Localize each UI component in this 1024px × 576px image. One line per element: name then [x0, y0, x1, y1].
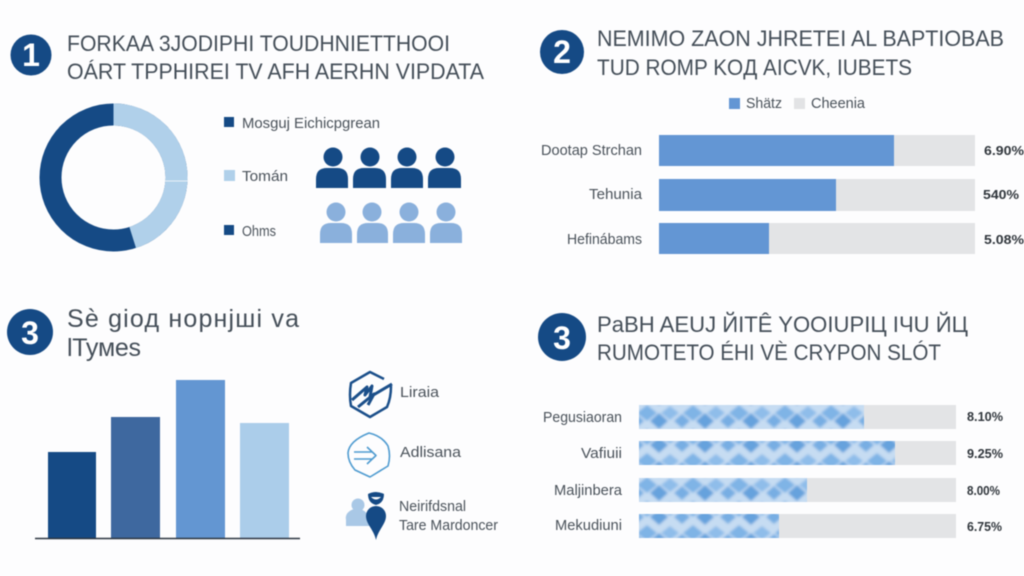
heading: section 2: TUD ROMP KOД AICVK, IUBETS [597, 55, 912, 80]
icon: people pin [346, 492, 386, 540]
donut chart [50, 104, 188, 248]
badge: number 2 [540, 30, 584, 74]
badge: number 1: 1 [22, 37, 40, 73]
label: Neirifdsnal Tare Mardoncer: Tare Mardoncer [399, 518, 498, 534]
badge: number 2: 2 [553, 34, 571, 70]
bar row: Mekudiuni: 6.75% [967, 519, 1002, 534]
bar row: Hefinábams: 5.08% [984, 232, 1024, 247]
bar row: Pegusiaoran: 8.10% [967, 409, 1003, 424]
bar row: Vafiuii: 9.25% [967, 446, 1003, 461]
legend: donut categories: Ohms [242, 224, 276, 240]
icons: light people row [320, 202, 462, 243]
heading: section 4 [597, 312, 968, 365]
legend: bar series [729, 96, 866, 112]
bar row: Maljinbera: 8.00% [967, 483, 1000, 498]
badge: number 3 [7, 309, 53, 355]
heading: section 1: FORKAA 3JODIPHI TOUDHNIETTHOOI [67, 31, 450, 56]
bar row: Vafiuii: Vafiuii [581, 446, 622, 462]
badge: number 1 [10, 34, 52, 76]
bar row: Hefinábams: Hefinábams [567, 232, 642, 248]
bar row: Tehunia: Tehunia [589, 187, 643, 203]
legend: donut categories: Mosguj Eichicpgrean [242, 116, 380, 132]
legend: bar series: Shätz [746, 96, 782, 112]
bar row: Mekudiuni [555, 513, 1002, 539]
heading: section 3: Sè gіод нopнjші vа [67, 305, 299, 333]
bar row: Tehunia [589, 179, 1019, 211]
icon: hexagon bolt [350, 372, 392, 417]
badge: second number 3: 3 [553, 320, 571, 356]
label: Adlisana: Adlisana [400, 445, 462, 461]
legend: donut categories [224, 116, 380, 240]
panel: section 3 column chart [7, 305, 498, 540]
panel: section 4 patterned bars [538, 312, 1003, 541]
label: Neirifdsnal Tare Mardoncer [399, 499, 498, 534]
panel: section 1 donut and people [10, 31, 484, 248]
legend: donut categories: Tomán [242, 169, 288, 185]
heading: section 1: OÁRT TPPHIREI TV AFH AERHN VIPDATA [67, 59, 484, 84]
bar row: Tehunia: 540% [983, 187, 1019, 202]
bar row: Mekudiuni: Mekudiuni [555, 518, 622, 534]
heading: section 4: RUMOTETO ÉHI VÈ CRYPON SLÓT [597, 340, 941, 365]
icons: dark people row [316, 148, 461, 188]
heading: section 2 [597, 26, 1004, 80]
legend: bar series: Cheenia [811, 96, 866, 112]
heading: section 2: NEMIMO ZAON JHRETEI AL BAPTIOBAB [597, 26, 1004, 51]
bar row: Hefinábams [567, 223, 1024, 254]
label: Neirifdsnal Tare Mardoncer: Neirifdsnal [399, 499, 466, 515]
heading: section 3: lTyмеs [67, 334, 141, 362]
bar row: Dootap Strchan [541, 135, 1024, 166]
bar row: Pegusiaoran: Pegusiaoran [543, 410, 622, 426]
bar row: Pegusiaoran [543, 404, 1004, 430]
heading: section 4: PaBH AEUJ ЙITÊ YOOIUPIЦ IЧU ЙЦ [597, 312, 968, 337]
bar row: Maljinbera: Maljinbera [554, 483, 623, 499]
icon: circular arrow [348, 433, 390, 477]
bar row: Dootap Strchan: Dootap Strchan [541, 143, 642, 159]
bar row: Vafiuii [580, 440, 1004, 466]
bar row: Dootap Strchan: 6.90% [984, 143, 1024, 158]
label: Liraia: Liraia [400, 385, 440, 401]
badge: second number 3 [538, 313, 586, 361]
heading: section 3 [67, 305, 299, 362]
column chart [35, 380, 300, 538]
heading: section 1 [67, 31, 484, 84]
panel: section 2 horizontal bars [540, 26, 1024, 254]
badge: number 3: 3 [21, 315, 39, 351]
bar row: Maljinbera [554, 478, 1000, 502]
